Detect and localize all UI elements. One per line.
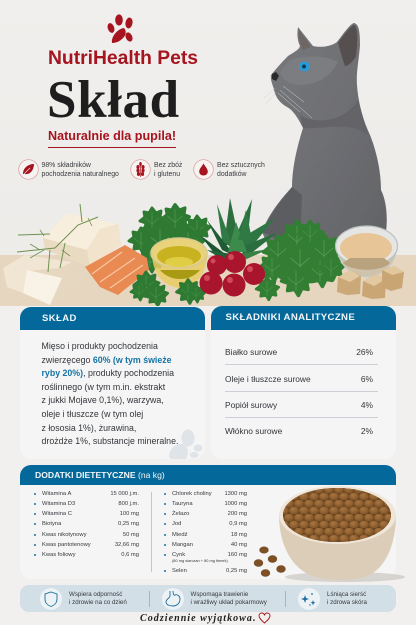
parsley behind oil xyxy=(129,205,210,272)
row: protein xyxy=(225,347,373,357)
row: fibre: 2% xyxy=(361,426,373,436)
benefit text: immunity xyxy=(69,591,127,606)
supplements list column 2: 40 mg xyxy=(231,542,247,548)
dill xyxy=(17,204,98,272)
benefit text: immunity: Wspiera odporność xyxy=(69,591,122,598)
supplements list column 2: 1000 mg xyxy=(224,501,247,507)
title: Skład xyxy=(47,71,180,129)
supplements list column 2: 200 mg xyxy=(228,511,247,517)
panel heading: skład: SKŁAD xyxy=(42,313,77,324)
supplements list column 1: 100 mg xyxy=(120,511,139,517)
supplements list column 1: 0,25 mg xyxy=(118,521,139,527)
row: ash: 4% xyxy=(361,400,373,410)
row: protein: Białko surowe xyxy=(225,347,277,357)
tagline: Codziennie wyjątkowa. xyxy=(140,613,257,624)
supplements list column 2: (80 mg siarczan + 80 mg tlenek) xyxy=(172,558,228,563)
feature icon: drop xyxy=(193,159,214,180)
supplements list column 2: 18 mg xyxy=(231,532,247,538)
supplements list column 2: Cynk xyxy=(172,552,185,558)
supplements list column 1: Biotyna xyxy=(42,521,61,527)
supplements list column 1: Kwas pantotenowy xyxy=(42,542,91,548)
parsley right xyxy=(256,221,344,300)
cranberries xyxy=(200,251,265,296)
aloe plant xyxy=(200,198,278,264)
icon: heart xyxy=(258,612,270,624)
feature text: natural: pochodzenia naturalnego xyxy=(42,171,119,178)
feature text: no artificial additives: Bez sztucznych xyxy=(217,162,265,169)
small parsley front xyxy=(131,272,205,306)
fish fillet lower xyxy=(3,255,87,305)
kibble bowl xyxy=(254,486,405,582)
feature text: natural xyxy=(42,162,119,178)
subtitle underline xyxy=(48,146,176,148)
cat eye xyxy=(299,62,310,72)
benefit text: digestion xyxy=(190,591,267,606)
lower background xyxy=(0,306,416,625)
brand name: NutriHealth Pets xyxy=(48,48,198,69)
icon: sparkles xyxy=(298,588,320,610)
supplements list column 2: Tauryna xyxy=(172,501,193,507)
icon: stomach xyxy=(162,588,184,610)
panel heading: supplements: DODATKI DIETETYCZNE (na kg) xyxy=(35,470,165,480)
feature text: no grains xyxy=(154,162,182,178)
cubes xyxy=(337,266,404,299)
composition text: Mięso i produkty pochodzenia xyxy=(42,341,158,351)
oil bowl xyxy=(151,238,207,288)
background scene: cat and ingredients on table xyxy=(0,23,416,306)
feature text: natural: 98% składników xyxy=(42,162,91,169)
logo paw icon xyxy=(108,14,133,43)
watermark paw xyxy=(169,430,202,459)
supplements list column 1: 50 mg xyxy=(123,532,139,538)
supplements list column 1: Witamina C xyxy=(42,511,72,517)
composition text: z łososia 1%), żurawina, xyxy=(42,423,136,433)
panel heading: skład xyxy=(20,307,205,330)
supplements list column 2: Miedź xyxy=(172,532,187,538)
benefit text: coat: Lśniąca sierść xyxy=(327,591,366,598)
panel: składniki analityczne xyxy=(211,306,396,459)
supplements list column 2: 1300 mg xyxy=(224,491,247,497)
benefits strip xyxy=(20,585,396,612)
supplements list column 1: Kwas nikotynowy xyxy=(42,532,86,538)
row: fibre: Włókno surowe xyxy=(225,426,282,436)
fish fillet upper xyxy=(43,213,121,267)
composition text: roślinnego (w tym m.in. ekstrakt xyxy=(42,382,165,392)
feature icon: wheat xyxy=(130,159,151,180)
supplements list column 2: Chlorek choliny xyxy=(172,491,212,497)
panel: dodatki dietetyczne xyxy=(20,465,396,579)
supplements list column 1: 0,6 mg xyxy=(121,552,139,558)
row: fats: Oleje i tłuszcze surowe xyxy=(225,374,311,384)
composition text: ryby 20%), produkty pochodzenia xyxy=(42,368,174,378)
row: protein: 26% xyxy=(356,347,373,357)
panel heading: supplements xyxy=(20,465,396,485)
cat xyxy=(262,23,387,250)
panel: skład xyxy=(20,307,205,459)
feature icon: leaf xyxy=(18,159,39,180)
supplements list column 2: Żelazo xyxy=(172,511,189,517)
composition text: oleje i tłuszcze (w tym olej xyxy=(42,409,143,419)
supplements list column 2 xyxy=(164,491,247,574)
supplements list column 2: 160 mg xyxy=(228,552,247,558)
supplements list column 1: 800 j.m. xyxy=(118,501,139,507)
table xyxy=(0,255,416,310)
supplements list column 1: Kwas foliowy xyxy=(42,552,76,558)
panel heading: analytical xyxy=(211,306,396,330)
panel heading: analytical: SKŁADNIKI ANALITYCZNE xyxy=(226,312,355,323)
supplements list column 1 xyxy=(34,491,139,558)
feature text: no artificial additives xyxy=(217,162,265,178)
supplements list column 1: 32,66 mg xyxy=(115,542,139,548)
supplements list column 2: 0,25 mg xyxy=(226,568,247,574)
row: ash xyxy=(225,400,373,410)
feature text: no grains: i glutenu xyxy=(154,171,180,178)
row: ash: Popiół surowy xyxy=(225,400,277,410)
benefit text: digestion: Wspomaga trawienie xyxy=(190,591,248,598)
composition text: drożdże 1%, substancje mineralne. xyxy=(42,436,178,446)
row: fats: 6% xyxy=(361,374,373,384)
supplements list column 2: Mangan xyxy=(172,542,193,548)
composition text: z jukki Mojave 0,1%), warzywa, xyxy=(42,395,164,405)
feature text: no artificial additives: dodatków xyxy=(217,171,246,178)
subtitle: Naturalnie dla pupila! xyxy=(48,129,176,143)
composition text xyxy=(42,341,178,446)
row: fats xyxy=(225,374,373,384)
benefit text: coat xyxy=(327,591,367,606)
feature text: no grains: Bez zbóż xyxy=(154,162,182,169)
bowl of powder xyxy=(336,226,398,277)
supplements list column 2: 0,9 mg xyxy=(229,521,247,527)
benefit text: coat: i zdrowa skóra xyxy=(327,599,367,606)
icon: shield xyxy=(40,588,62,610)
composition text: zwierzęcego 60% (w tym świeże xyxy=(42,355,172,365)
row: fibre xyxy=(225,426,373,436)
supplements list column 2: Jod xyxy=(172,521,181,527)
supplements list column 1: Witamina A xyxy=(42,491,71,497)
supplements list column 1: Witamina D3 xyxy=(42,501,75,507)
salmon xyxy=(85,245,149,295)
supplements list column 2: Selen xyxy=(172,568,187,574)
benefit text: immunity: i zdrowie na co dzień xyxy=(69,599,127,606)
supplements list column 1: 15 000 j.m. xyxy=(110,491,139,497)
benefit text: digestion: i wrażliwy układ pokarmowy xyxy=(190,599,267,606)
